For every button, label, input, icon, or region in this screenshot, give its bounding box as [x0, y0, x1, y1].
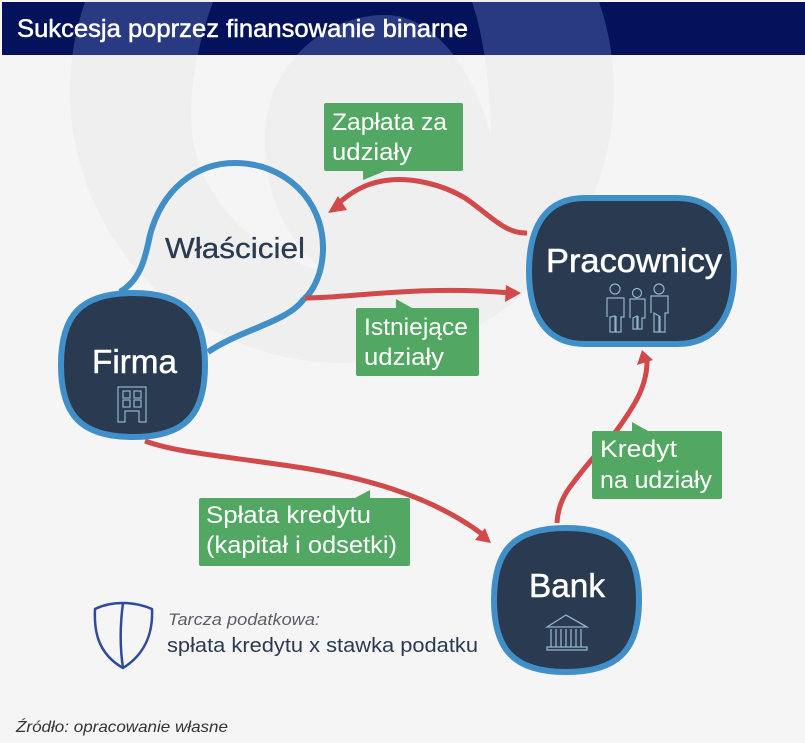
tax shield note: spłata kredytu x stawka podatku	[167, 635, 478, 657]
node: Pracownicy: Pracownicy	[546, 242, 723, 279]
arrow: loan for shares	[557, 350, 653, 523]
icon: office building	[118, 387, 146, 422]
icon: bank building	[547, 615, 587, 650]
label: Istniejące udziały: udziały	[364, 344, 444, 371]
node: Bank	[494, 528, 639, 672]
label: Kredyt na udziały	[592, 422, 722, 499]
owner bubble: Właściciel	[120, 163, 323, 352]
node: Firma: Firma	[92, 343, 178, 380]
label: Zapłata za udziały	[324, 103, 463, 180]
node: Pracownicy	[529, 198, 734, 344]
label: Istniejące udziały	[356, 299, 479, 376]
arrow: payment for shares	[328, 180, 527, 233]
label: Zapłata za udziały: Zapłata za	[332, 109, 448, 136]
node: Bank: Bank	[529, 567, 606, 604]
label: Istniejące udziały: Istniejące	[364, 314, 468, 341]
background watermark	[70, 0, 614, 363]
owner bubble: Właściciel: Właściciel	[165, 233, 305, 265]
label: Spłata kredytu (kapitał i odsetki): Spłata kredytu	[206, 502, 371, 529]
title: Sukcesja poprzez finansowanie binarne	[17, 15, 468, 43]
icon: people	[607, 284, 668, 332]
label: Kredyt na udziały: Kredyt	[600, 436, 677, 463]
tax shield note	[167, 610, 478, 657]
arrow: loan repayment	[145, 441, 491, 543]
arrow: existing shares	[305, 285, 521, 302]
tax shield note: Tarcza podatkowa:	[168, 610, 320, 629]
icon: shield	[95, 603, 152, 668]
label: Zapłata za udziały: udziały	[332, 139, 412, 166]
source note: Źródło: opracowanie własne	[15, 717, 228, 736]
node: Firma	[61, 293, 205, 437]
label: Kredyt na udziały: na udziały	[600, 467, 712, 494]
label: Spłata kredytu (kapitał i odsetki): (kapitał i odsetki)	[206, 532, 397, 559]
header bar	[2, 2, 805, 55]
label: Spłata kredytu (kapitał i odsetki)	[199, 490, 410, 566]
